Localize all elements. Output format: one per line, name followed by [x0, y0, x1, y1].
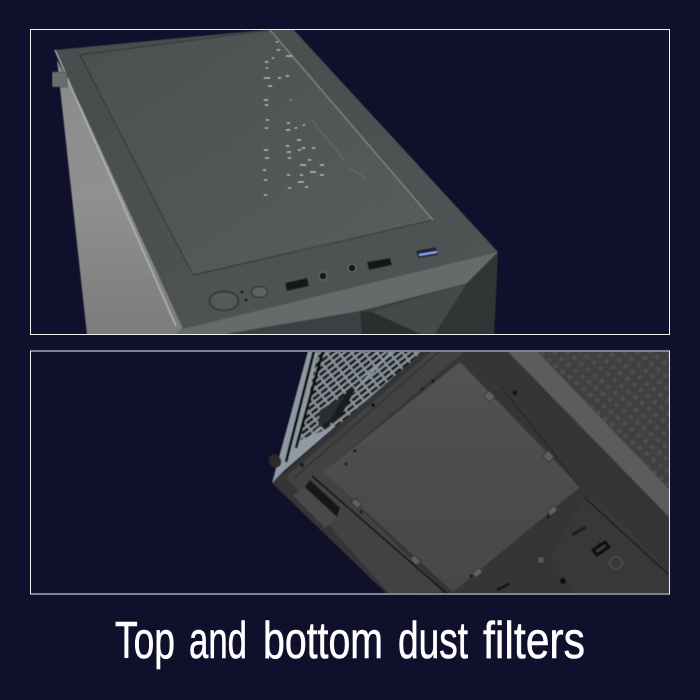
- front lighter strip: [175, 252, 498, 335]
- audio jack: [319, 272, 327, 280]
- panel: top border: [30, 30, 670, 334]
- title: Top: [115, 612, 175, 670]
- reset button: [252, 286, 268, 298]
- power button: [210, 292, 238, 310]
- title: dust: [398, 612, 468, 670]
- title: bottom: [263, 612, 383, 670]
- filter clips: [300, 380, 550, 578]
- bottom dust filter mesh: [323, 362, 580, 592]
- mesh dust filter: [80, 30, 433, 275]
- glass side with perforation: [537, 351, 670, 490]
- panel: bottom dust filter: [266, 351, 670, 594]
- light speckles: [263, 42, 324, 195]
- front angular panels: [434, 252, 498, 335]
- PSU mount details: [497, 527, 622, 590]
- foot recess: [305, 480, 340, 517]
- indicator dots: [240, 290, 248, 302]
- bottom inner rail: [286, 351, 465, 594]
- light side strip: [507, 351, 670, 518]
- case front base: [177, 254, 462, 334]
- mic jack: [348, 264, 356, 272]
- front panel perforated: [272, 351, 423, 483]
- case side glass panel: [56, 60, 183, 334]
- panel: top dust filter: [52, 29, 498, 335]
- blue usb port: [416, 247, 438, 258]
- title: [115, 612, 585, 670]
- case top face: [55, 29, 498, 329]
- title: filters: [483, 612, 585, 670]
- hinge clip: [52, 72, 67, 87]
- rail groove: [294, 351, 440, 478]
- panel: bottom border: [30, 351, 670, 594]
- bottom face: [272, 351, 670, 594]
- title: and: [189, 612, 247, 670]
- filter outline: [312, 476, 447, 594]
- usb port right: [367, 258, 392, 270]
- thumbscrew: [268, 454, 282, 468]
- filter highlight edge: [270, 30, 433, 220]
- usb port left: [285, 278, 309, 291]
- white edge highlight: [55, 50, 176, 326]
- front panel frame struts: [286, 351, 323, 462]
- clip tabs: [351, 390, 558, 578]
- PSU area plate: [596, 542, 606, 556]
